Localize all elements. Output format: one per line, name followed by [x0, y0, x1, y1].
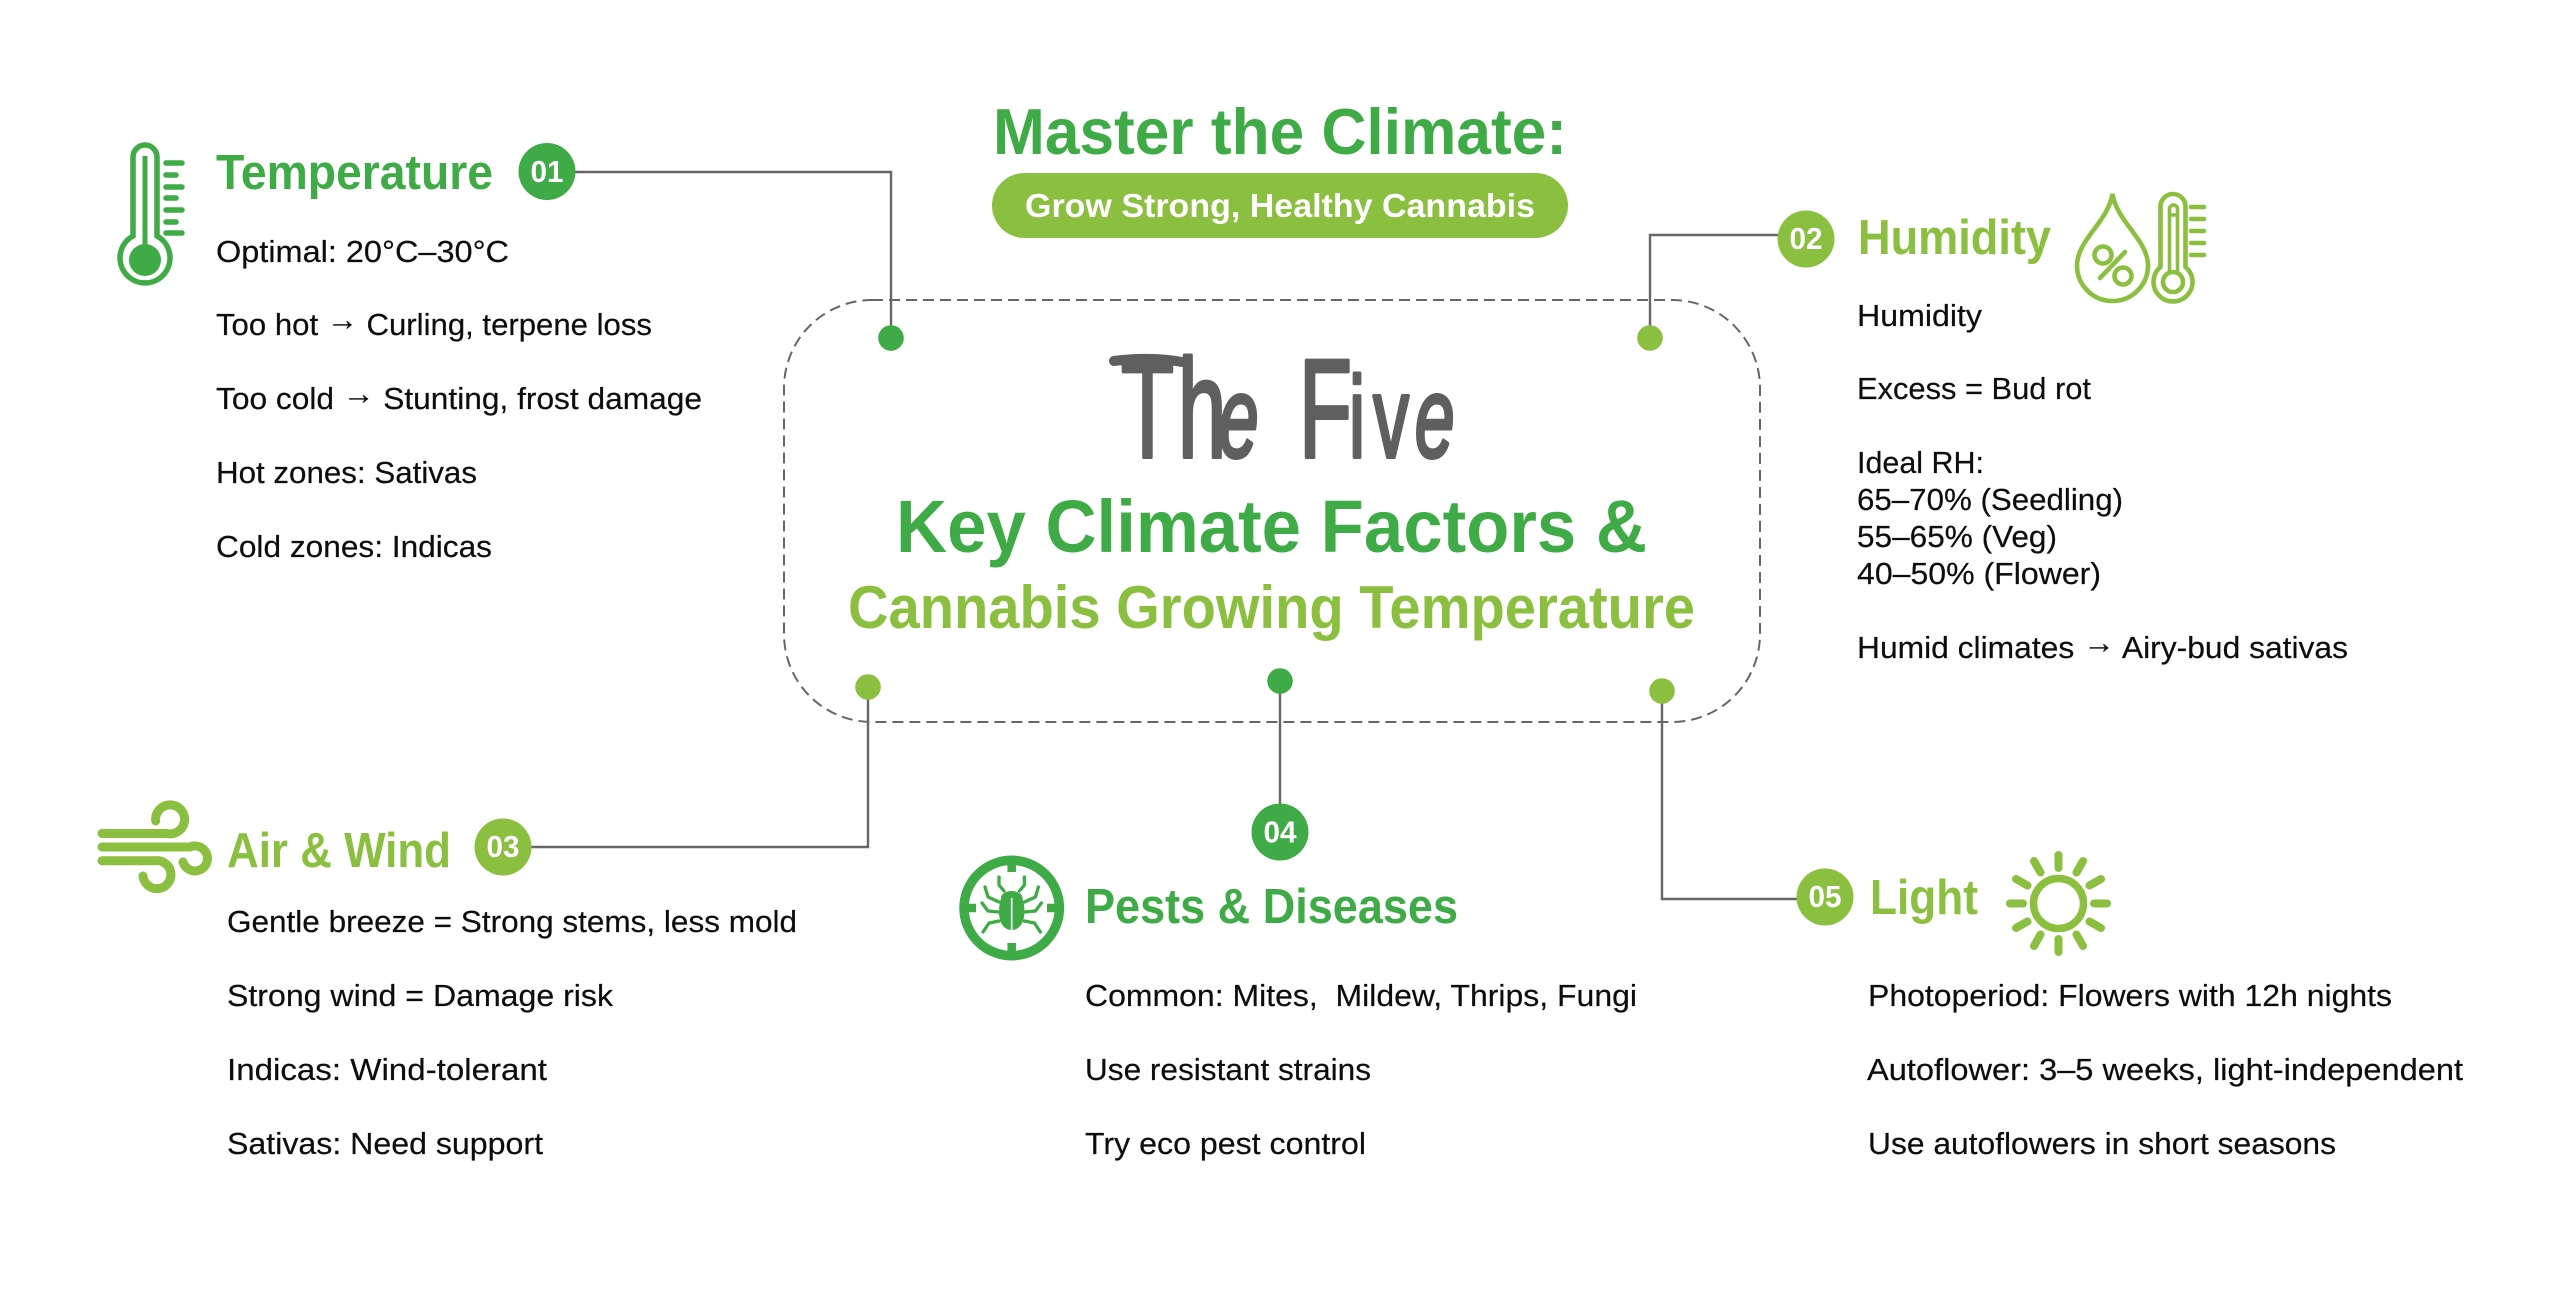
- text: humidity list: Excess = Bud rot: [1857, 371, 2091, 406]
- dot: 01: [878, 325, 904, 351]
- icon: thermometer: [120, 145, 182, 283]
- text: temperature list: Stunting, frost damage: [374, 381, 702, 416]
- subtitle pill: [992, 173, 1568, 238]
- text: wind list: Gentle breeze = Strong stems, less mold: [227, 904, 797, 939]
- badge 02: 02: [1790, 221, 1822, 256]
- badge 04: [1252, 804, 1308, 860]
- heading: Cannabis Growing Temperature: Cannabis Growing Temperature: [848, 574, 1695, 641]
- connector: 01: [574, 172, 891, 338]
- text: temperature list: →: [343, 376, 374, 411]
- text: pests list: Try eco pest control: [1085, 1126, 1366, 1161]
- badge 05: 05: [1808, 879, 1842, 914]
- text: light list: [1867, 978, 2463, 1161]
- text: temperature list: Cold zones: Indicas: [216, 529, 492, 564]
- text: temperature list: Too hot: [216, 307, 318, 342]
- text: humidity list: 40–50% (Flower): [1857, 556, 2101, 591]
- badge 05: [1796, 868, 1854, 926]
- text: humidity list: Humid climates: [1857, 630, 2069, 665]
- text: humidity list: [1857, 298, 2348, 665]
- text: humidity list: 55–65% (Veg): [1857, 519, 2057, 554]
- heading: Humidity: Humidity: [1858, 211, 2051, 265]
- panel: light: [1796, 855, 2463, 1161]
- panel: humidity: [1778, 194, 2348, 665]
- text: pests list: Use resistant strains: [1085, 1052, 1371, 1087]
- icon: sun: [2010, 855, 2107, 952]
- text: temperature list: Optimal: 20°C–30°C: [216, 234, 509, 269]
- heading: The Five: F: [1299, 331, 1352, 487]
- heading: Light: Light: [1870, 871, 1978, 925]
- connector: 02: [1650, 235, 1780, 338]
- badge 02: [1778, 210, 1834, 268]
- text: humidity list: →: [2083, 625, 2115, 660]
- heading: The Five: Th: [1121, 331, 1226, 487]
- text: light list: Autoflower: 3–5 weeks, light-independent: [1867, 1052, 2463, 1087]
- heading: Temperature: Temperature: [216, 146, 493, 200]
- heading: The Five: e: [1219, 354, 1259, 482]
- heading: The Five: [1114, 331, 1454, 487]
- text: light list: Use autoflowers in short seasons: [1868, 1126, 2336, 1161]
- dashed central panel: [784, 300, 1760, 722]
- dot: 04: [1267, 668, 1293, 694]
- heading: Key Climate Factors: Key Climate Factors &: [896, 485, 1647, 568]
- text: wind list: Strong wind = Damage risk: [227, 978, 614, 1013]
- icon: bug in crosshair: [964, 860, 1059, 956]
- text: temperature list: Curling, terpene loss: [358, 307, 652, 342]
- text: light list: Photoperiod: Flowers with 12h nights: [1868, 978, 2392, 1013]
- text: wind list: [227, 904, 797, 1161]
- text: temperature list: [216, 234, 702, 564]
- text: humidity list: 65–70% (Seedling): [1857, 482, 2123, 517]
- badge 01: 01: [530, 154, 564, 189]
- badge 03: [474, 818, 532, 876]
- text: humidity list: Airy-bud sativas: [2115, 630, 2348, 665]
- text: temperature list: Too cold: [216, 381, 331, 416]
- badge 04: 04: [1264, 814, 1297, 850]
- text: temperature list: →: [327, 302, 358, 337]
- heading: The Five: i: [1349, 354, 1365, 482]
- connector: 05: [1662, 691, 1800, 899]
- dot: 05: [1649, 678, 1675, 704]
- dot: 02: [1637, 325, 1663, 351]
- connector: 03: [530, 687, 868, 847]
- text: wind list: Indicas: Wind-tolerant: [227, 1052, 547, 1087]
- text: humidity list: Humidity: [1857, 298, 1983, 333]
- subtitle pill: Grow Strong, Healthy Cannabis: [1025, 187, 1535, 224]
- panel: temperature: [120, 143, 702, 564]
- heading: The Five: v: [1373, 354, 1409, 482]
- heading: Pests & Diseases: Pests & Diseases: [1085, 880, 1458, 934]
- heading: The Five: e: [1415, 354, 1454, 482]
- text: temperature list: Hot zones: Sativas: [216, 455, 477, 490]
- text: wind list: Sativas: Need support: [227, 1126, 543, 1161]
- text: pests list: [1085, 978, 1637, 1161]
- text: pests list: Common: Mites, Mildew, Thrips, Fungi: [1085, 978, 1637, 1013]
- icon: humidity drop and thermometer: [2077, 194, 2204, 301]
- badge 03: 03: [486, 829, 520, 864]
- connector: 04: [1279, 681, 1281, 806]
- icon: wind: [102, 805, 207, 889]
- text: humidity list: Ideal RH:: [1857, 445, 1984, 480]
- heading: Air & Wind: Air & Wind: [227, 824, 451, 878]
- panel: air and wind: [102, 805, 797, 1161]
- title: Master the Climate: Master the Climate:: [993, 95, 1567, 168]
- badge 01: [518, 143, 576, 200]
- dot: 03: [855, 674, 881, 700]
- panel: pests and diseases: [964, 804, 1637, 1161]
